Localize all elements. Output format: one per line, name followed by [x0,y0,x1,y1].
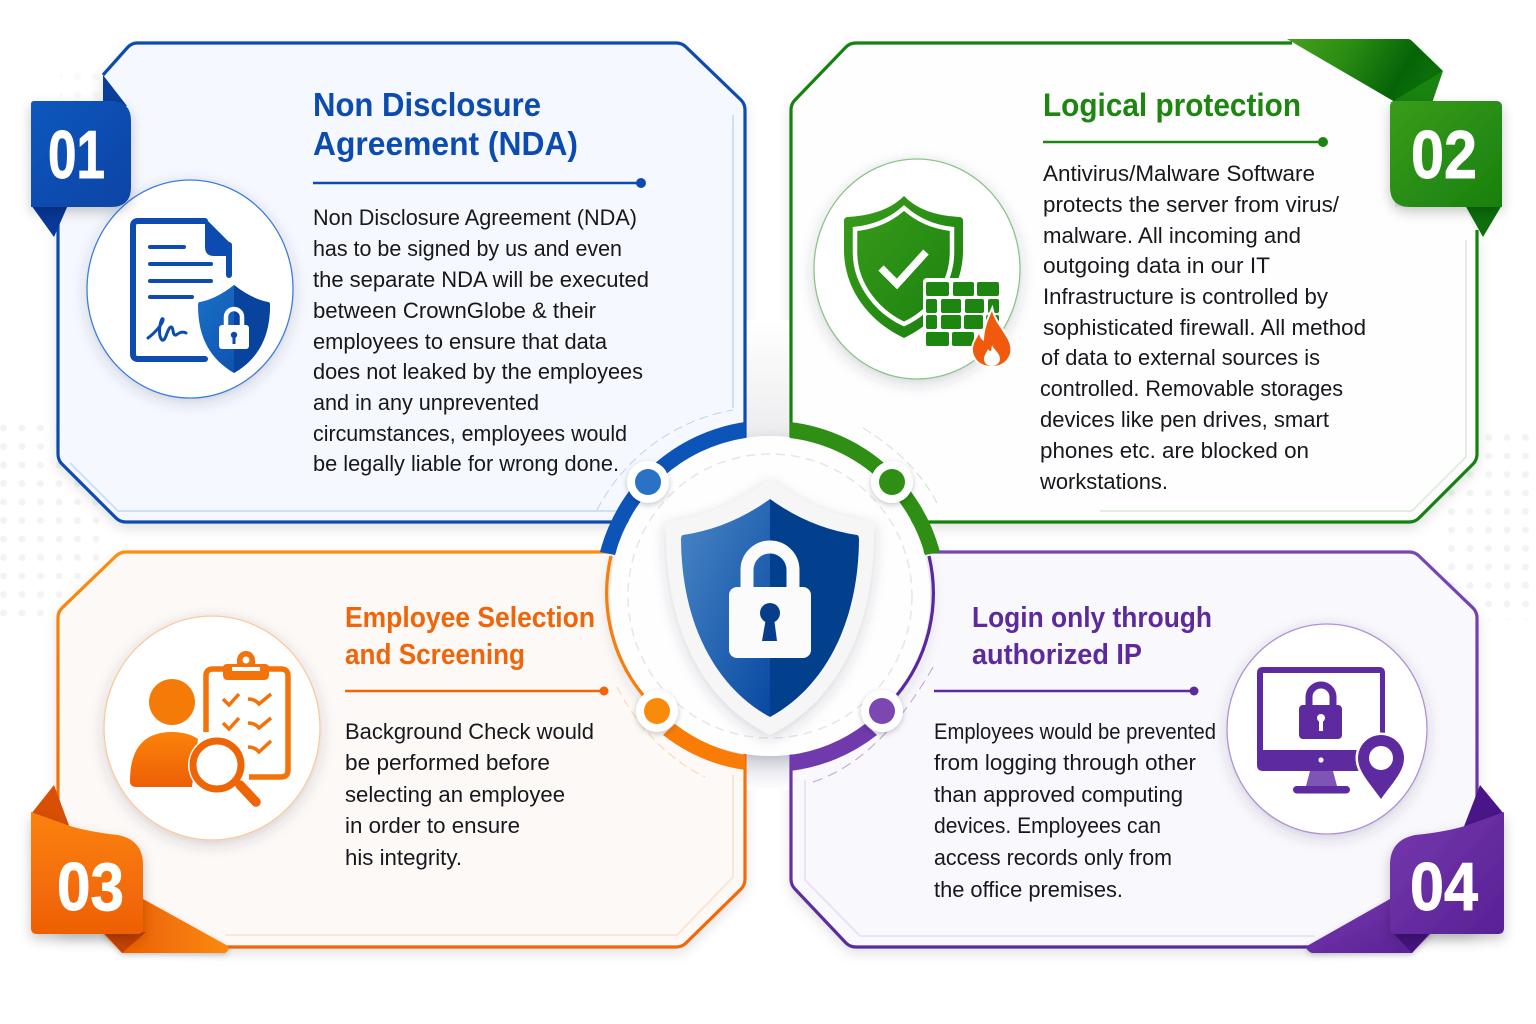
text block: logical protection description: sophisticated firewall. All method [1043,315,1366,340]
ring: thin orange and purple arcs [607,556,933,695]
text block: NDA description: Non Disclosure Agreement (NDA) [313,205,637,230]
text block: NDA description: the separate NDA will be executed [313,267,649,292]
panel 2: Logical protection [791,43,1477,522]
text block: NDA description: and in any unprevented [313,390,539,415]
badge 04 [1307,785,1504,953]
text block: logical protection description: malware. All incoming and [1043,223,1301,248]
text block: employee screening description [345,719,594,870]
panel 1 background [58,43,745,522]
heading: Employee Selection and Screening: and Screening [345,639,525,671]
text block: employee screening description: in order to ensure [345,813,520,838]
text block: NDA description: does not leaked by the employees [313,359,643,384]
text block: login restriction description: access records only from [934,845,1172,870]
badge 01: 01 [48,117,105,193]
panel 3 outline [58,552,745,947]
ring: green arc [790,422,940,555]
text block: logical protection description: phones etc. are blocked on [1040,438,1309,463]
text block: NDA description: be legally liable for wrong done. [313,451,619,476]
text block: login restriction description: Employees would be prevented [934,719,1216,744]
heading divider [313,178,646,188]
text block: login restriction description: from logging through other [934,750,1196,775]
node dots [627,461,913,732]
heading: Non Disclosure Agreement (NDA): Agreement (NDA) [313,125,578,162]
panel 4 background [791,552,1477,947]
text block: logical protection description: protects the server from virus/ [1043,192,1340,217]
text block: employee screening description: Background Check would [345,719,594,744]
heading: Login only through authorized IP: authorized IP [972,639,1142,671]
shield [665,479,875,735]
heading: Login only through authorized IP: Login only through [972,602,1212,634]
ring: orange arc [663,724,745,770]
panel 2 outline [791,43,1477,522]
badge 02 [1287,39,1502,237]
text block: login restriction description: devices. Employees can [934,813,1161,838]
text block: employee screening description: his integrity. [345,845,462,870]
text block: employee screening description: be performed before [345,750,550,775]
text block: logical protection description: of data to external sources is [1041,345,1320,370]
panel 4 outline [791,552,1477,947]
text block: NDA description: circumstances, employees would [313,421,627,446]
ring: purple arc [790,724,877,771]
panel 2 background [791,43,1477,522]
heading: Non Disclosure Agreement (NDA): Non Disclosure [313,86,541,123]
text block: logical protection description: Infrastructure is controlled by [1043,284,1328,309]
central shield emblem with ring [597,320,940,790]
panel 1 outline [58,43,745,522]
text block: logical protection description: workstations. [1039,469,1168,494]
heading divider [345,686,608,696]
panel 1: Non Disclosure Agreement [58,43,745,522]
icon: monitor with lock and location pin [1227,624,1427,834]
text block: logical protection description [1039,161,1366,494]
text block: logical protection description: devices like pen drives, smart [1040,407,1329,432]
ring: white disc [610,436,930,756]
text block: logical protection description: Antivirus/Malware Software [1043,161,1315,186]
badge 04: 04 [1410,849,1478,925]
badge 03 [31,785,229,953]
heading: Logical protection: Logical protection [1043,87,1301,123]
firewall bricks [923,278,1002,348]
heading: Employee Selection and Screening [345,602,595,671]
panel 4: Login only through authorized IP [791,552,1477,947]
text block: employee screening description: selecting an employee [345,782,565,807]
panel 3 background [58,552,745,947]
icon: shield, firewall and flame [814,159,1020,379]
ring: blue arc [600,422,745,555]
text block: login restriction description: than approved computing [934,782,1183,807]
text block: logical protection description: outgoing data in our IT [1043,253,1270,278]
badge 01 [31,75,131,237]
icon: person, checklist and magnifier [104,616,320,840]
text block: login restriction description [934,719,1216,902]
badge 03: 03 [57,849,124,925]
badge 02: 02 [1411,117,1477,193]
panel 3: Employee Selection and Screening [58,552,745,947]
icon: signed document with shield [87,180,293,398]
text block: NDA description: employees to ensure that data [313,329,608,354]
gray gaps behind ring [747,320,789,790]
heading: Employee Selection and Screening: Employee Selection [345,602,595,634]
text block: login restriction description: the office premises. [934,877,1123,902]
text block: logical protection description: controlled. Removable storages [1040,376,1343,401]
heading: Login only through authorized IP [972,602,1212,671]
heading divider [934,686,1198,696]
heading: Non Disclosure Agreement (NDA) [313,86,578,162]
heading divider [1043,137,1328,147]
text block: NDA description [313,205,649,476]
text block: NDA description: has to be signed by us and even [313,236,622,261]
text block: NDA description: between CrownGlobe & their [313,298,596,323]
